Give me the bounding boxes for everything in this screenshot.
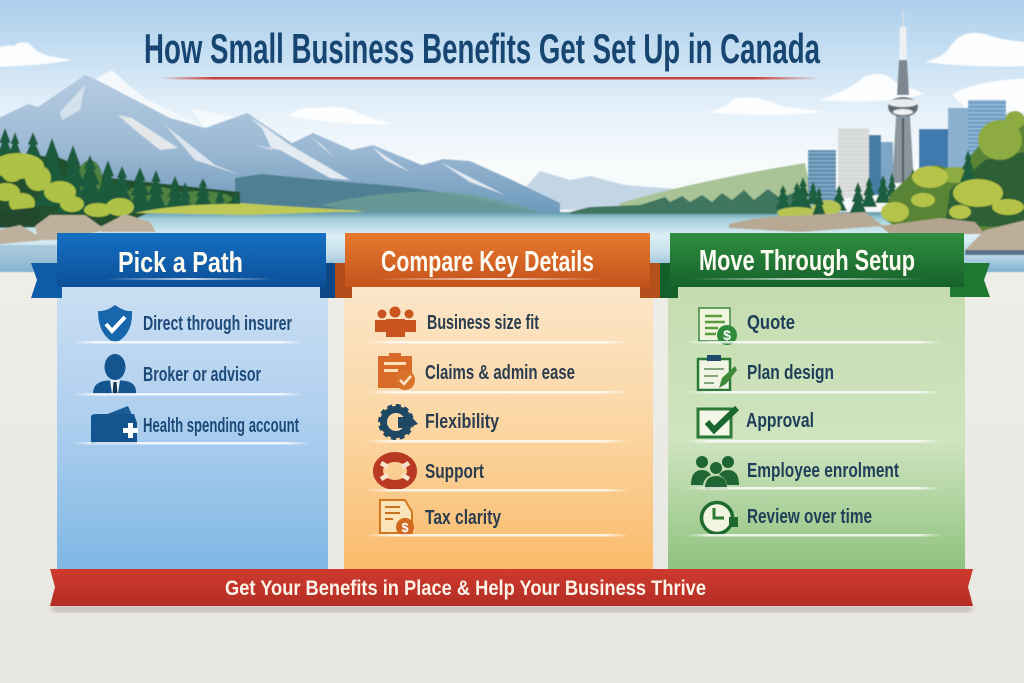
label: Claims & admin ease [425,362,575,384]
ribbon tail right [950,263,990,297]
icon: shield [98,305,132,343]
icon: quote document: $ [723,327,731,343]
mountain range [0,70,560,212]
icon: clipboard check [378,353,415,390]
distant shoreline [135,203,365,212]
item: health spending account [91,406,299,444]
icon: check box [698,408,737,437]
right light foliage [939,111,1024,183]
lake [0,212,1024,272]
item: quote [699,308,795,345]
label: Business size fit [427,312,539,334]
shore bushes [777,200,841,219]
ribbon tail left [31,263,62,298]
heading underline [105,278,275,280]
panel body [57,285,328,569]
header ribbon [345,233,650,287]
city skyline [808,100,1006,205]
clouds [0,33,1024,128]
label: Quote [747,312,795,334]
item: broker or advisor [93,354,261,394]
panel: pick a path [31,233,336,569]
panel: compare key details [335,233,662,569]
item: employee enrolment [691,456,899,489]
green hill [620,163,815,212]
left foliage dark [0,150,240,228]
label: Support [425,461,484,483]
label: Review over time [747,506,872,528]
panel body [668,285,965,569]
item: support [378,457,484,485]
left trees [0,128,243,215]
item: plan design [698,355,834,390]
snow caps [60,70,505,195]
ribbon tail right [320,263,336,298]
banner ribbon [50,569,973,606]
icon: lifebuoy [378,457,412,485]
icon: businessperson [93,354,136,394]
icon: clock [702,502,738,534]
title underline [160,77,820,80]
panel: move through setup [660,233,990,569]
foreground pine [812,187,826,216]
CN tower [888,10,918,183]
heading underline [375,278,605,280]
ribbon tail right [640,263,662,298]
lake lower blend [0,245,57,270]
footer banner [50,569,973,606]
icon: gear with arrow [380,406,418,438]
right rocks [729,212,1024,255]
item: claims and admin ease [378,353,575,390]
label: Tax clarity [425,507,502,529]
ribbon tail left [335,263,352,298]
sky [0,0,1024,215]
right bright foliage [881,166,1024,222]
item: direct through insurer [98,305,292,343]
panel body [344,285,653,569]
far treeline [570,189,800,214]
heading: Compare Key Details [381,246,594,278]
label: Direct through insurer [143,313,292,335]
item: tax clarity [380,500,502,536]
item: flexibility [380,406,500,438]
heading: Pick a Path [118,247,243,279]
right pine [960,150,976,182]
label: Employee enrolment [747,460,899,482]
left shore bush [135,204,365,215]
label: Plan design [747,362,834,384]
dark base [0,207,42,228]
label: Approval [746,410,814,432]
item: approval [698,408,814,437]
header ribbon [670,233,964,287]
banner text: Get Your Benefits in Place & Help Your Business Thrive [225,577,706,600]
right foliage shadow [945,150,1024,228]
left mid foliage [78,160,232,208]
icon: tax document: $ [401,520,409,535]
mountain foothills [235,174,540,212]
item: review over time [702,502,872,534]
icon: team [375,306,416,337]
icon: clipboard with pencil [698,355,737,390]
label: Health spending account [143,415,299,437]
right foliage mass [883,118,1024,234]
right front trees [775,169,919,214]
item: business size fit [375,306,539,337]
left bright foliage [0,153,134,217]
label: Broker or advisor [143,364,261,386]
ribbon tail left [660,263,678,298]
landscape scene [0,0,1024,272]
header ribbon [57,233,326,287]
footer banner shadow [52,606,972,612]
far mountains [505,171,690,210]
left rocks [0,214,156,245]
heading underline [690,278,925,280]
icon: wallet with cross [91,406,138,444]
heading: Move Through Setup [699,245,915,277]
icon: employees [691,456,739,489]
label: Flexibility [425,411,500,433]
